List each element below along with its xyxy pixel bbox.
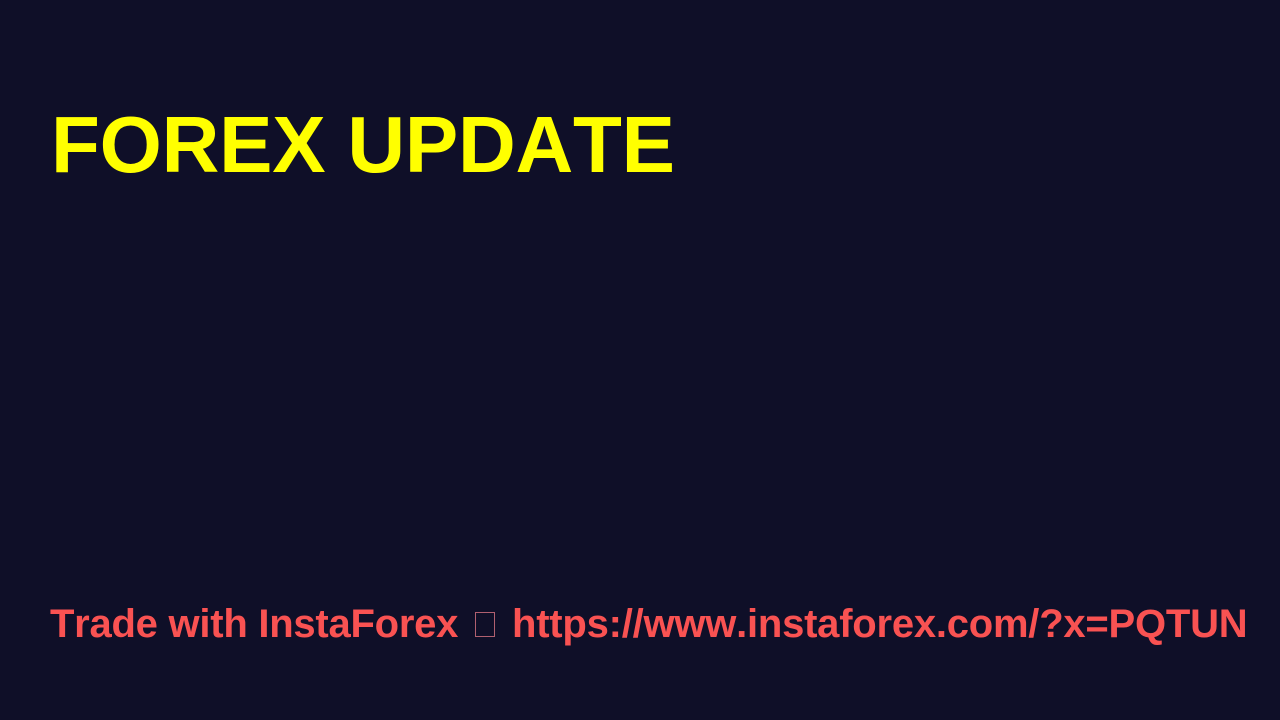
icon: missing glyph box xyxy=(475,612,495,637)
footer text: broker name: Trade with InstaForex xyxy=(50,602,458,646)
title: FOREX UPDATE xyxy=(51,100,675,189)
footer call to action xyxy=(50,602,1247,646)
footer text: link: https://www.instaforex.com/?x=PQTUN xyxy=(512,602,1247,646)
